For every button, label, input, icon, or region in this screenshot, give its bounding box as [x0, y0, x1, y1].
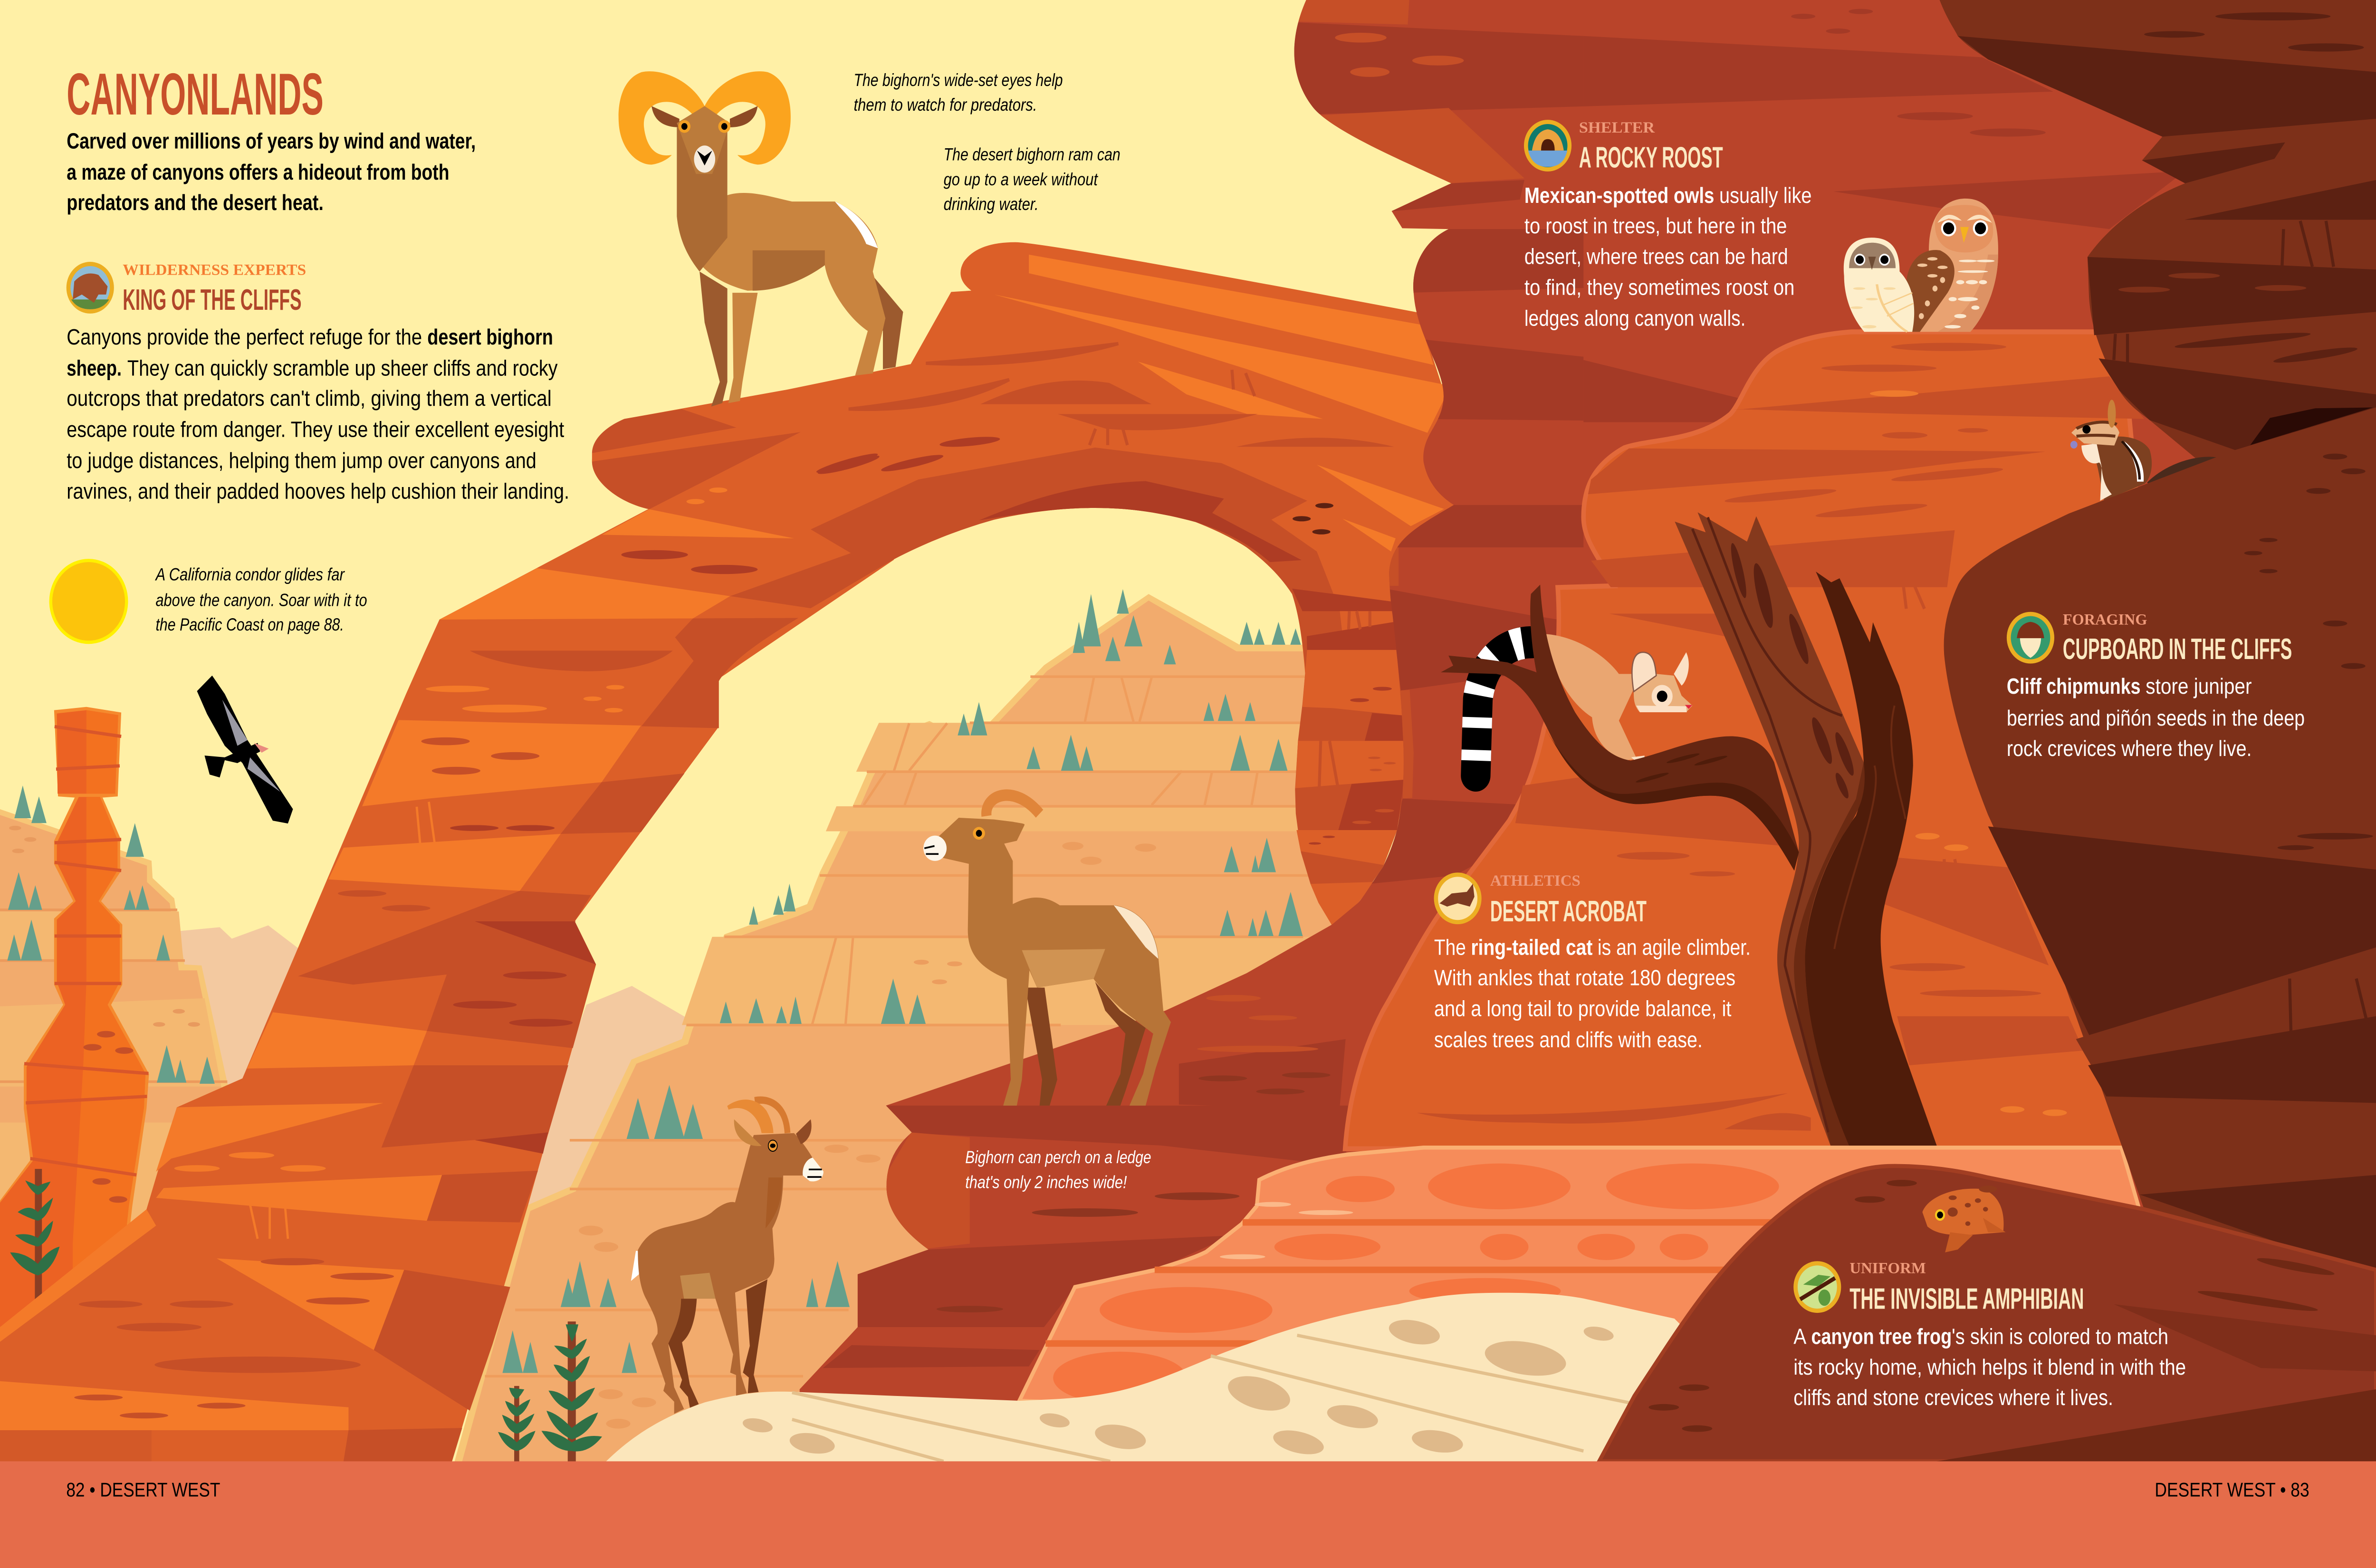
caption: wide-set eyes: [854, 70, 1063, 115]
left mesa: [0, 809, 265, 1461]
caption: condor: above the canyon. Soar with it to: [155, 590, 367, 610]
caption: water: go up to a week without: [944, 170, 1099, 190]
caption: condor: the Pacific Coast on page 88.: [155, 615, 344, 634]
page number right: DESERT WEST • 83: [2155, 1479, 2309, 1501]
body text: [1434, 936, 1751, 1052]
body text: [2007, 675, 2305, 761]
body text: its rocky home, which helps it blend in with the: [1793, 1355, 2186, 1379]
caption: wide-set eyes: them to watch for predators.: [854, 95, 1037, 115]
body text: rock crevices where they live.: [2007, 737, 2252, 761]
icon: ring-tailed cat tail: [1475, 642, 1532, 775]
label: WILDERNESS EXPERTS: [123, 261, 306, 278]
panel: cream sand layer: [606, 1293, 1819, 1461]
body text: berries and piñón seeds in the deep: [2007, 707, 2305, 730]
heading: THE INVISIBLE AMPHIBIAN: [1849, 1282, 2084, 1315]
body text: and a long tail to provide balance, it: [1434, 997, 1732, 1021]
body text: ravines, and their padded hooves help cushion their landing.: [67, 479, 569, 504]
body text: With ankles that rotate 180 degrees: [1434, 966, 1735, 990]
icon: lower bighorn ewe: [631, 1100, 824, 1414]
intro text block: Carved over millions of years by wind and water,: [67, 129, 476, 153]
label: UNIFORM: [1849, 1259, 1926, 1277]
panel: the invisible amphibian: [1793, 1259, 2186, 1410]
icon: tree trunk: [1675, 512, 1937, 1147]
icon: bison badge: [67, 262, 114, 314]
caption: condor: [155, 564, 367, 634]
label: ATHLETICS: [1490, 872, 1581, 889]
icon: canyon tree frog: [1922, 1186, 2006, 1252]
center mesa seen through arch: [455, 594, 1364, 1461]
teal conifer trees on the mesas: [7, 589, 1303, 1373]
icon: ram on top of the arch: [619, 71, 903, 407]
panel: red canyon wall and bighorn ledge: [799, 0, 2195, 1401]
icon: california condor: [197, 676, 293, 823]
heading: DESERT ACROBAT: [1490, 895, 1647, 927]
icon: burrow shadow and right dark cliffs: [1940, 0, 2376, 491]
body text: store juniper: [2146, 675, 2252, 699]
icon: tree branch with spike: [1441, 584, 1799, 870]
icon: sun: [51, 561, 126, 642]
body text: A: [1793, 1325, 1807, 1349]
body text: The: [1434, 936, 1466, 960]
body text: desert bighorn: [427, 325, 553, 349]
hoodoo rock spire: [0, 707, 149, 1358]
body text: [1793, 1325, 2186, 1410]
body text: usually like: [1719, 184, 1811, 208]
panel: desert acrobat: [1434, 872, 1751, 1052]
panel: frog hill: [1599, 1166, 2376, 1461]
caption: water: The desert bighorn ram can: [944, 144, 1121, 164]
caption: ledge: [965, 1147, 1151, 1192]
body text: ledges along canyon walls.: [1524, 306, 1745, 331]
panel: salmon rock layers: [1019, 1147, 2213, 1461]
panel: top span of the arch: [440, 242, 1455, 728]
body text: cliffs and stone crevices where it lives.: [1793, 1386, 2113, 1410]
caption: water: drinking water.: [944, 194, 1039, 214]
caption: condor: A California condor glides far: [155, 564, 345, 584]
body text: Canyons provide the perfect refuge for the: [67, 325, 422, 349]
intro text block: a maze of canyons offers a hideout from both: [67, 160, 449, 184]
icon: grasshopper badge: [1793, 1261, 1841, 1313]
caption: wide-set eyes: The bighorn's wide-set eyes help: [854, 70, 1063, 90]
footer band: [0, 1461, 2376, 1568]
icon: hare badge: [1434, 872, 1482, 924]
body text: outcrops that predators can't climb, giving them a vertical: [67, 387, 552, 411]
body text: to roost in trees, but here in the: [1524, 214, 1787, 238]
body text: canyon tree frog: [1811, 1325, 1952, 1349]
intro text block: predators and the desert heat.: [67, 191, 324, 215]
heading: A ROCKY ROOST: [1579, 141, 1723, 174]
heading: KING OF THE CLIFFS: [123, 283, 302, 316]
distant pink mountains: [152, 917, 849, 1243]
body text: [1524, 184, 1811, 331]
panel: a rocky roost: [1524, 119, 1811, 331]
body text: Cliff chipmunks: [2007, 675, 2140, 699]
panel: left leg of the arch: [0, 491, 894, 1461]
label: FORAGING: [2063, 611, 2147, 628]
panel: cupboard in the cliffs: [2007, 611, 2305, 761]
title: CANYONLANDS: [67, 62, 324, 127]
icon: pine trees in foreground: [498, 1321, 602, 1463]
panel: orange canyon wall with owl ledge: [1345, 332, 2197, 1149]
body text: sheep.: [67, 356, 122, 381]
body text: desert, where trees can be hard: [1524, 245, 1788, 269]
body text: Mexican-spotted owls: [1524, 184, 1714, 208]
icon: cliff chipmunk: [2070, 400, 2218, 501]
page number left: 82 • DESERT WEST: [66, 1479, 220, 1501]
body text: 's skin is colored to match: [1952, 1325, 2168, 1349]
body text: is an agile climber.: [1598, 936, 1751, 960]
intro text block: [67, 129, 476, 215]
label: SHELTER: [1579, 119, 1655, 136]
panel: king of the cliffs: [67, 261, 569, 504]
caption: ledge: Bighorn can perch on a ledge: [965, 1147, 1151, 1167]
body text: scales trees and cliffs with ease.: [1434, 1028, 1703, 1052]
caption: water: [944, 144, 1121, 214]
body text: ring-tailed cat: [1471, 936, 1593, 960]
caption: ledge: that's only 2 inches wide!: [965, 1172, 1127, 1192]
panel: right rock with foraging text background: [1944, 408, 2376, 1293]
icon: acorn badge: [2007, 612, 2054, 664]
body text: They can quickly scramble up sheer cliffs and rocky: [127, 356, 558, 381]
body text: to find, they sometimes roost on: [1524, 276, 1794, 300]
icon: small pine in front of hoodoo: [10, 1169, 59, 1301]
icon: ring-tailed cat: [1536, 634, 1692, 765]
body text: escape route from danger. They use their excellent eyesight: [67, 418, 565, 442]
icon: owls on the ledge: [1844, 199, 1998, 332]
body text: to judge distances, helping them jump over canyons and: [67, 449, 537, 473]
icon: shelter badge: [1524, 120, 1571, 172]
body text: [67, 325, 569, 504]
icon: middle bighorn ewe: [923, 795, 1171, 1106]
panel: right leg of the arch: [1292, 588, 1404, 925]
